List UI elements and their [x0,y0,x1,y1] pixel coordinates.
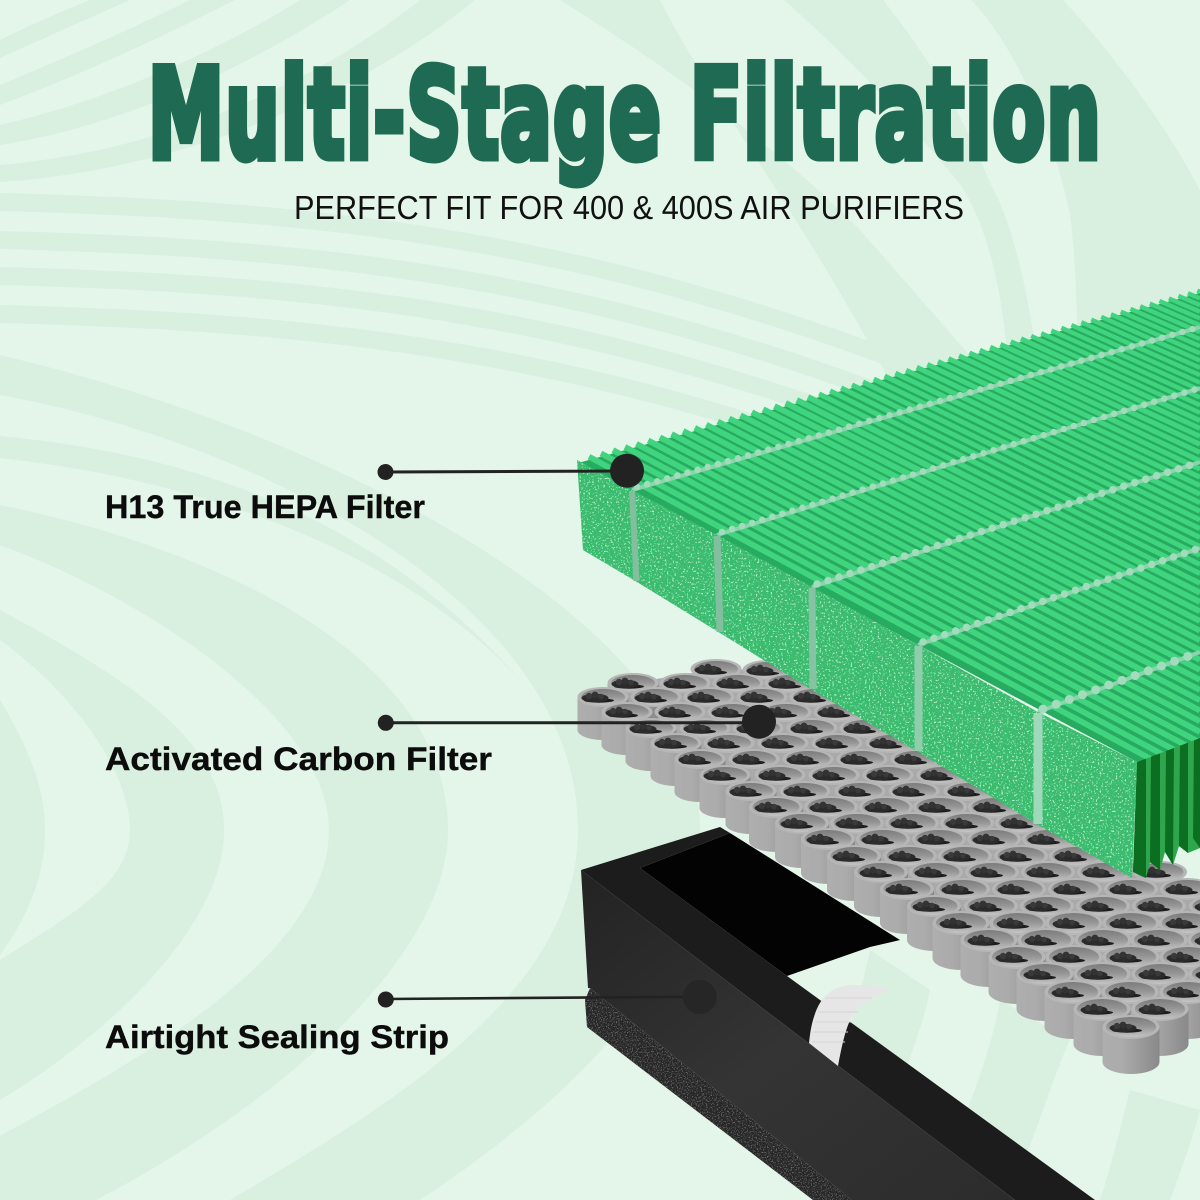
pleat end strips at the right [1133,736,1200,878]
leader line and markers [378,980,717,1014]
frame top surface [581,827,1095,1200]
subtitle: PERFECT FIT FOR 400 & 400S AIR PURIFIERS [294,189,964,226]
white adhesive tape tab [809,985,891,1066]
pale support threads across the pleats [632,327,1200,712]
callout: Activated Carbon Filter [105,705,776,777]
title: Multi-Stage Filtration [148,43,1102,188]
frame side face [581,870,1015,1200]
label: Airtight Sealing Strip [105,1019,449,1055]
H13 true HEPA pleated green filter [570,291,1200,885]
honeycomb outer cylinder walls [578,683,1200,1074]
filter front face [570,455,1145,885]
honeycomb cells [578,659,1200,1039]
label: H13 True HEPA Filter [105,489,425,525]
airtight sealing strip foam [585,988,852,1200]
leader line and markers [378,705,776,739]
activated carbon honeycomb filter [578,659,1200,1074]
leader line and markers [378,454,644,488]
vertical support threads on front face [632,491,1038,824]
filter top surface [578,293,1200,762]
frame opening [640,833,900,976]
carbon base plate [603,669,1200,1028]
callout: Airtight Sealing Strip [105,980,717,1055]
label: Activated Carbon Filter [105,741,492,777]
callout: H13 True HEPA Filter [105,454,644,525]
pleat stripes [589,291,1200,785]
black sealing frame [580,827,1095,1200]
